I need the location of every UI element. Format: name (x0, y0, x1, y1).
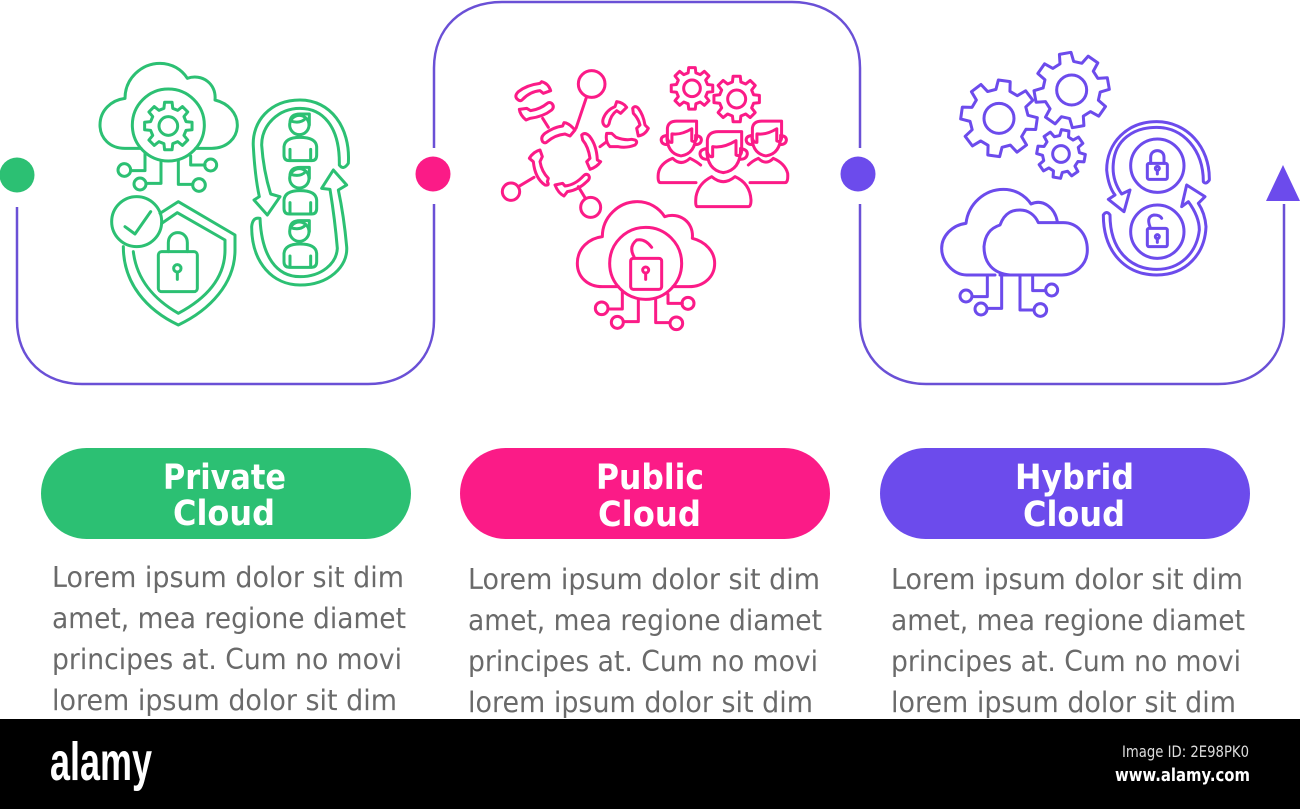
text block: private cloud description (52, 561, 406, 717)
pill: Hybrid Cloud: Hybrid (1015, 458, 1134, 498)
footer logo: alamy (50, 732, 152, 792)
text block: private cloud description: lorem ipsum dolor sit dim (52, 684, 397, 717)
pill: Public Cloud: Public (596, 458, 704, 498)
arrow: timeline end (1266, 165, 1300, 201)
icon: lock and unlock cycle (1103, 122, 1209, 275)
icon group: private cloud (100, 63, 349, 325)
text block: hybrid cloud description (891, 563, 1245, 719)
pill: Public Cloud (460, 448, 830, 539)
icon: network of rotating arrows (502, 71, 648, 217)
icon: cloud with gear (100, 63, 237, 191)
pill: Private Cloud: Cloud (173, 494, 275, 534)
text block: public cloud description: amet, mea regione diamet (468, 604, 822, 637)
icon: people in rotation loop (252, 100, 349, 285)
icon group: public cloud (502, 68, 788, 330)
icon: double cloud with circuits (942, 189, 1087, 316)
footer bar (0, 719, 1300, 809)
pill: Hybrid Cloud: Cloud (1023, 495, 1125, 535)
marker: pink dot (416, 156, 450, 192)
text block: public cloud description (468, 563, 822, 719)
pill: Private Cloud: Private (163, 458, 286, 498)
footer image id: Image ID: 2E98PK0 (1122, 742, 1249, 761)
icon group: hybrid cloud (942, 47, 1209, 316)
icon: shield with lock (112, 197, 235, 325)
text block: private cloud description: principes at. Cum no movi (52, 643, 402, 676)
text block: public cloud description: principes at. Cum no movi (468, 645, 818, 678)
pill: Public Cloud: Cloud (598, 495, 701, 535)
text block: private cloud description: amet, mea regione diamet (52, 602, 406, 635)
text block: hybrid cloud description: lorem ipsum dolor sit dim (891, 686, 1236, 719)
text block: public cloud description: Lorem ipsum dolor sit dim (468, 563, 820, 596)
pill: Private Cloud (41, 448, 411, 539)
timeline outline (17, 2, 1284, 384)
text block: hybrid cloud description: Lorem ipsum dolor sit dim (891, 563, 1243, 596)
marker: purple dot (840, 156, 876, 192)
text block: public cloud description: lorem ipsum dolor sit dim (468, 686, 813, 719)
text block: hybrid cloud description: principes at. Cum no movi (891, 645, 1241, 678)
text block: private cloud description: Lorem ipsum dolor sit dim (52, 561, 404, 594)
footer url: www.alamy.com (1115, 765, 1250, 786)
icon: cloud with open lock (577, 202, 715, 330)
text block: hybrid cloud description: amet, mea regione diamet (891, 604, 1245, 637)
icon: three gears (956, 47, 1115, 182)
icon: team with gears (658, 68, 788, 207)
marker: green dot (0, 158, 34, 192)
pill: Hybrid Cloud (880, 448, 1250, 539)
